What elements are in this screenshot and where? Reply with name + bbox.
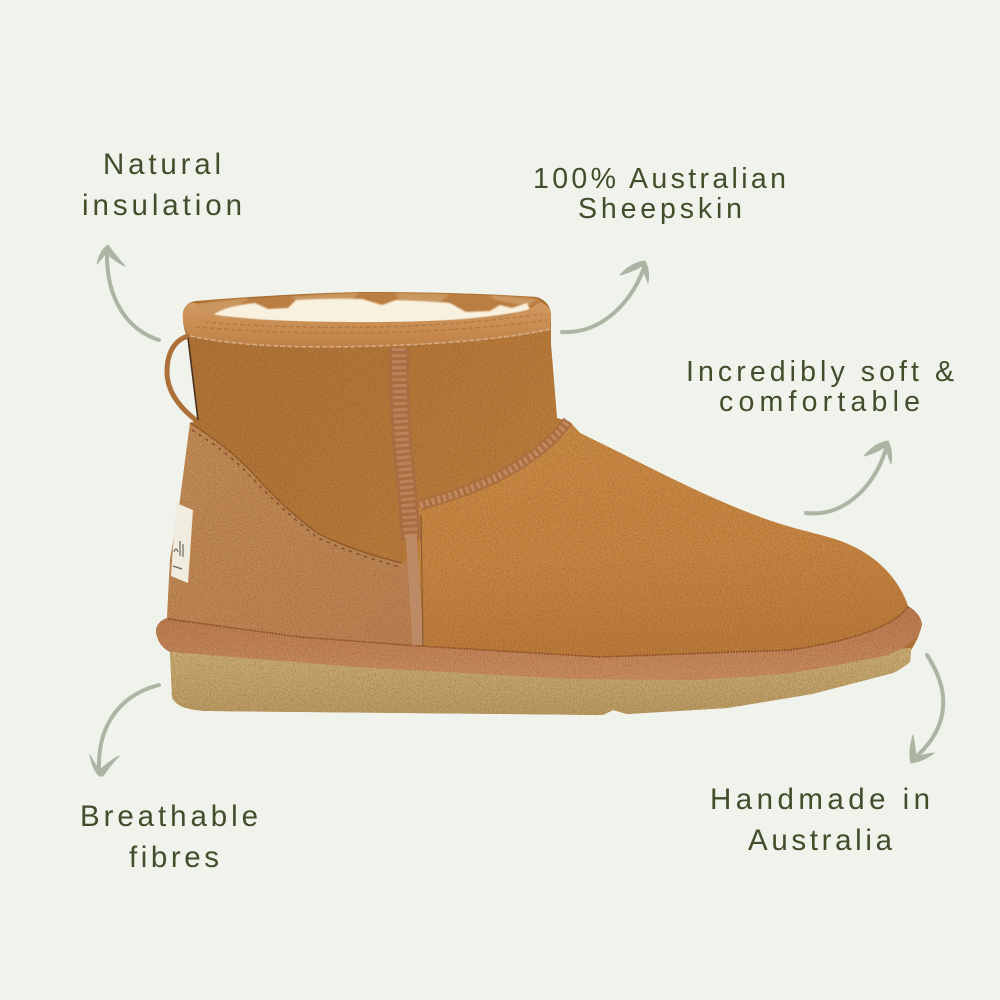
callout: breathable	[80, 800, 258, 874]
callout: soft and comfortable	[686, 356, 954, 418]
arrow: handmade	[910, 655, 943, 763]
label line: Australia	[748, 824, 893, 857]
label line: Incredibly soft &	[686, 356, 954, 388]
horizontal seam	[420, 421, 568, 505]
label line: insulation	[82, 189, 242, 222]
callout: sheepskin	[533, 163, 786, 225]
upper shaft	[188, 328, 575, 570]
fleece fur	[213, 299, 530, 324]
lining and rim	[190, 293, 548, 322]
horizontal seam highlights	[420, 421, 568, 505]
welt stitch line	[168, 607, 908, 657]
label line: 100% Australian	[533, 163, 786, 195]
dark back edge	[188, 338, 198, 420]
sewn label	[171, 503, 193, 583]
collar binding	[183, 302, 551, 347]
callout: natural insulation	[82, 148, 242, 222]
label line: Breathable	[80, 800, 258, 833]
collar ribbing	[196, 314, 548, 333]
arrow: sheepskin	[562, 261, 649, 332]
heel pull loop	[167, 336, 197, 421]
toe vamp	[418, 422, 908, 664]
boot silhouette base	[156, 292, 922, 715]
heel counter stitching	[192, 430, 400, 567]
arrow: natural insulation	[97, 245, 159, 340]
label line: Sheepskin	[578, 193, 742, 225]
label line: fibres	[129, 841, 219, 874]
welt	[156, 606, 922, 680]
vertical seam upper	[399, 348, 411, 540]
label line: Handmade in	[710, 783, 930, 816]
seam dark edge	[421, 515, 423, 646]
label mark	[173, 541, 183, 569]
heel counter	[167, 423, 424, 650]
vertical seam lower	[411, 535, 418, 645]
label line: comfortable	[719, 386, 920, 418]
label line: Natural	[103, 148, 221, 181]
arrow: soft and comfortable	[806, 441, 892, 513]
heel counter edge	[190, 423, 402, 563]
suede grain texture	[150, 285, 930, 720]
sole	[170, 648, 911, 715]
arrow: breathable	[90, 685, 159, 776]
callout: handmade	[710, 783, 930, 857]
vertical seam upper highlights	[399, 348, 411, 540]
lining light patches	[197, 293, 537, 316]
collar stitching	[190, 329, 550, 347]
boot illustration	[150, 285, 930, 720]
